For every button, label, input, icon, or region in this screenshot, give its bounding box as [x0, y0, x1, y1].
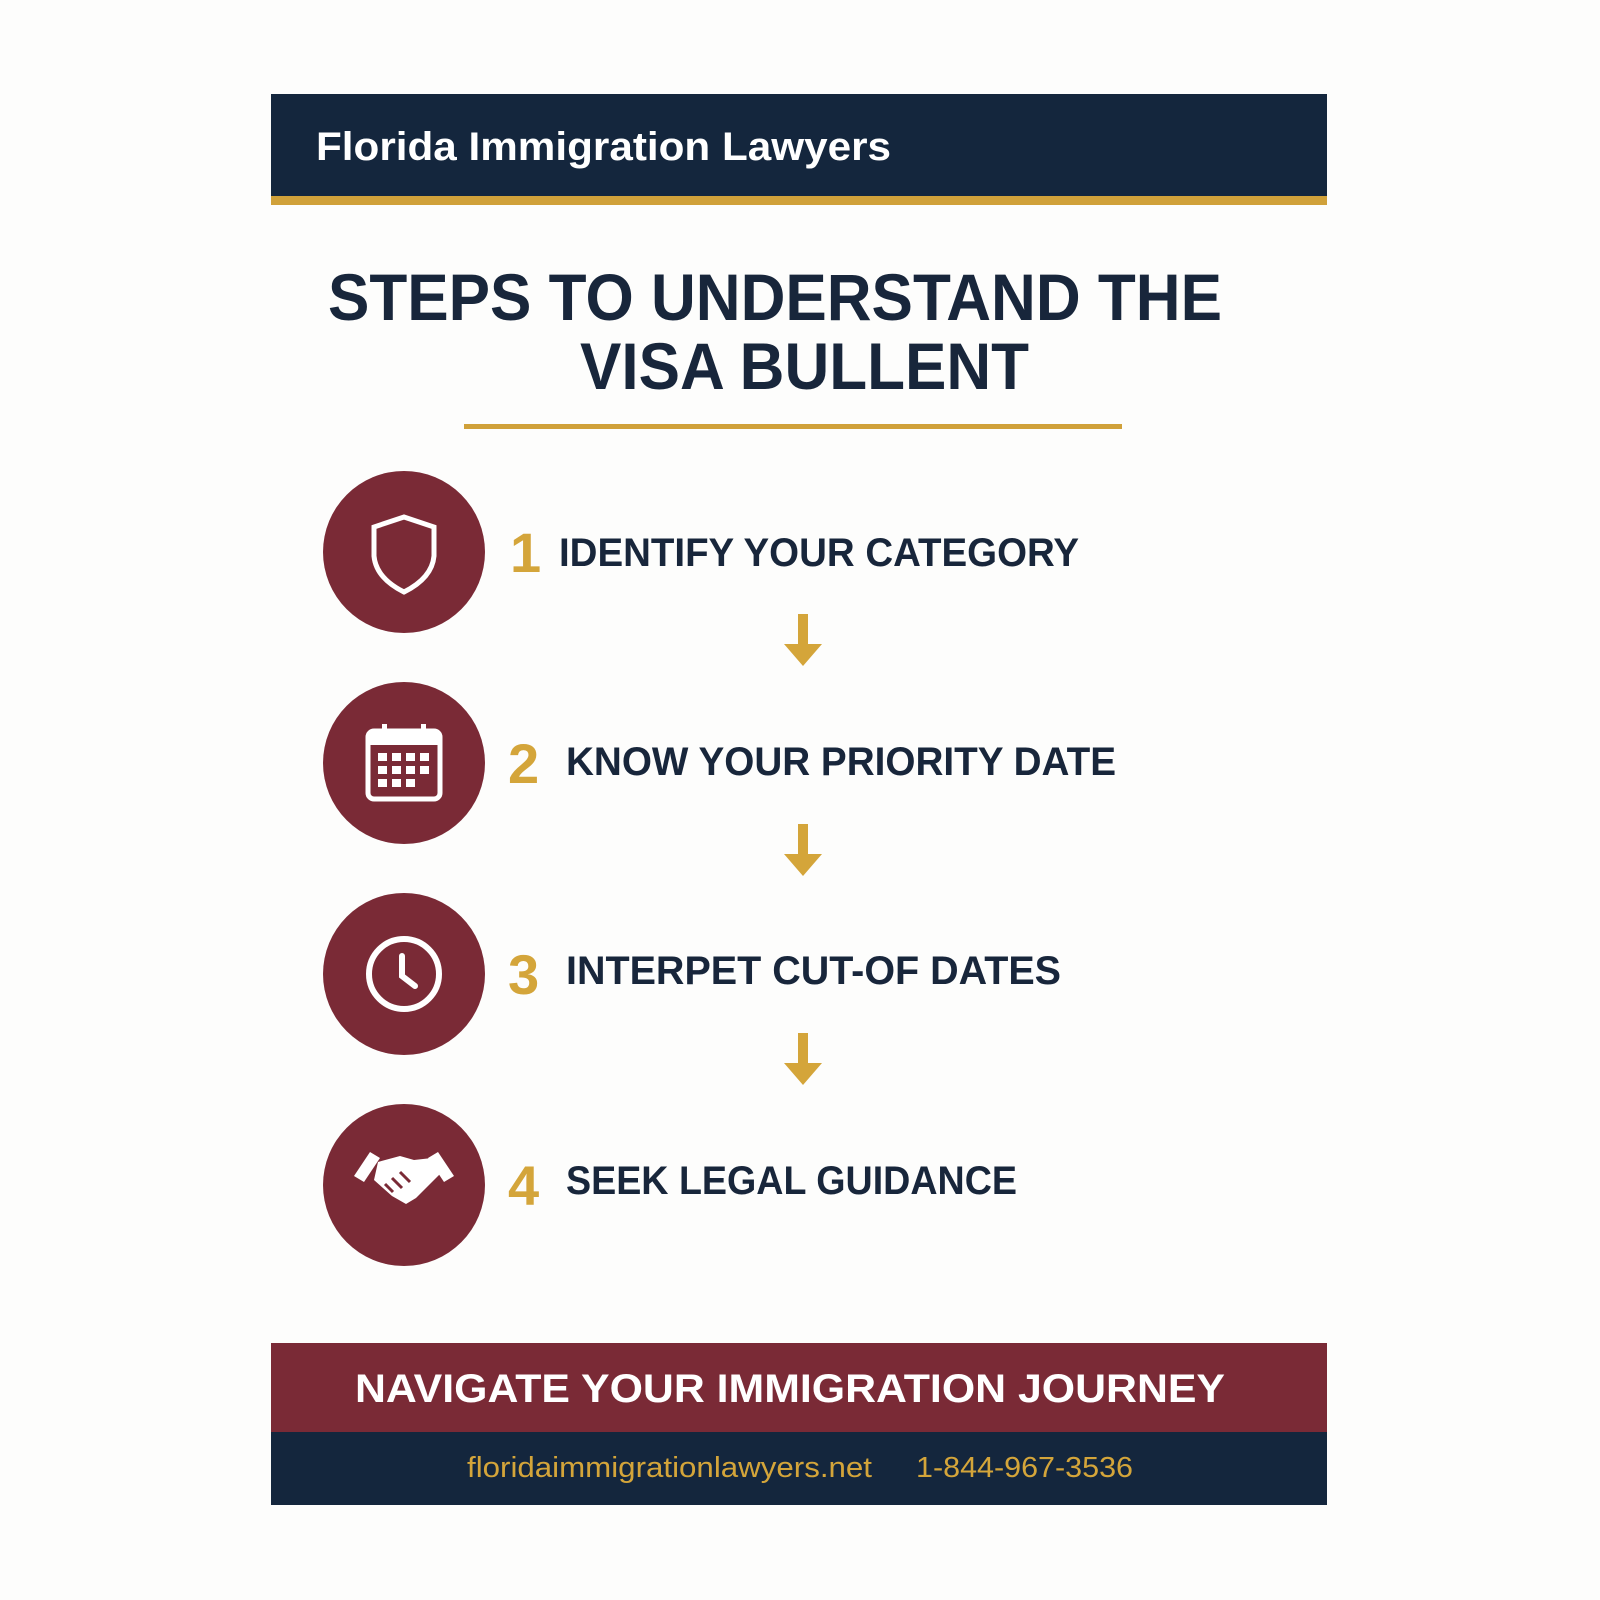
step 2: 2: [508, 732, 539, 795]
footer banner: [271, 1343, 1327, 1433]
title: STEPS TO UNDERSTAND THE: [328, 260, 1222, 334]
step 4: 4: [508, 1154, 539, 1217]
title: VISA BULLENT: [580, 329, 1029, 403]
icon: shield: [374, 517, 434, 592]
step 2: [323, 682, 1116, 844]
step 4: SEEK LEGAL GUIDANCE: [566, 1159, 1017, 1203]
icon: handshake: [354, 1152, 454, 1204]
footer contact: [271, 1432, 1327, 1505]
step 1: [323, 471, 1079, 633]
footer contact: floridaimmigrationlawyers.net: [467, 1452, 872, 1484]
icon: clock: [369, 939, 439, 1009]
arrow 2: [784, 824, 822, 876]
title underline: [464, 424, 1122, 429]
footer banner: NAVIGATE YOUR IMMIGRATION JOURNEY: [355, 1367, 1225, 1411]
step 1: 1: [510, 521, 541, 584]
footer contact: 1-844-967-3536: [916, 1452, 1133, 1484]
step 1: IDENTIFY YOUR CATEGORY: [559, 531, 1079, 575]
step 3: INTERPET CUT-OF DATES: [566, 949, 1061, 993]
step 2: KNOW YOUR PRIORITY DATE: [566, 740, 1116, 784]
step 3: [323, 893, 1061, 1055]
header bar: [271, 94, 1327, 205]
arrow 3: [784, 1033, 822, 1085]
title: [328, 260, 1222, 403]
icon: calendar: [368, 724, 440, 799]
arrow 1: [784, 614, 822, 666]
step 3: 3: [508, 943, 539, 1006]
header text: Florida Immigration Lawyers: [316, 125, 891, 169]
step 4: [323, 1104, 1017, 1266]
